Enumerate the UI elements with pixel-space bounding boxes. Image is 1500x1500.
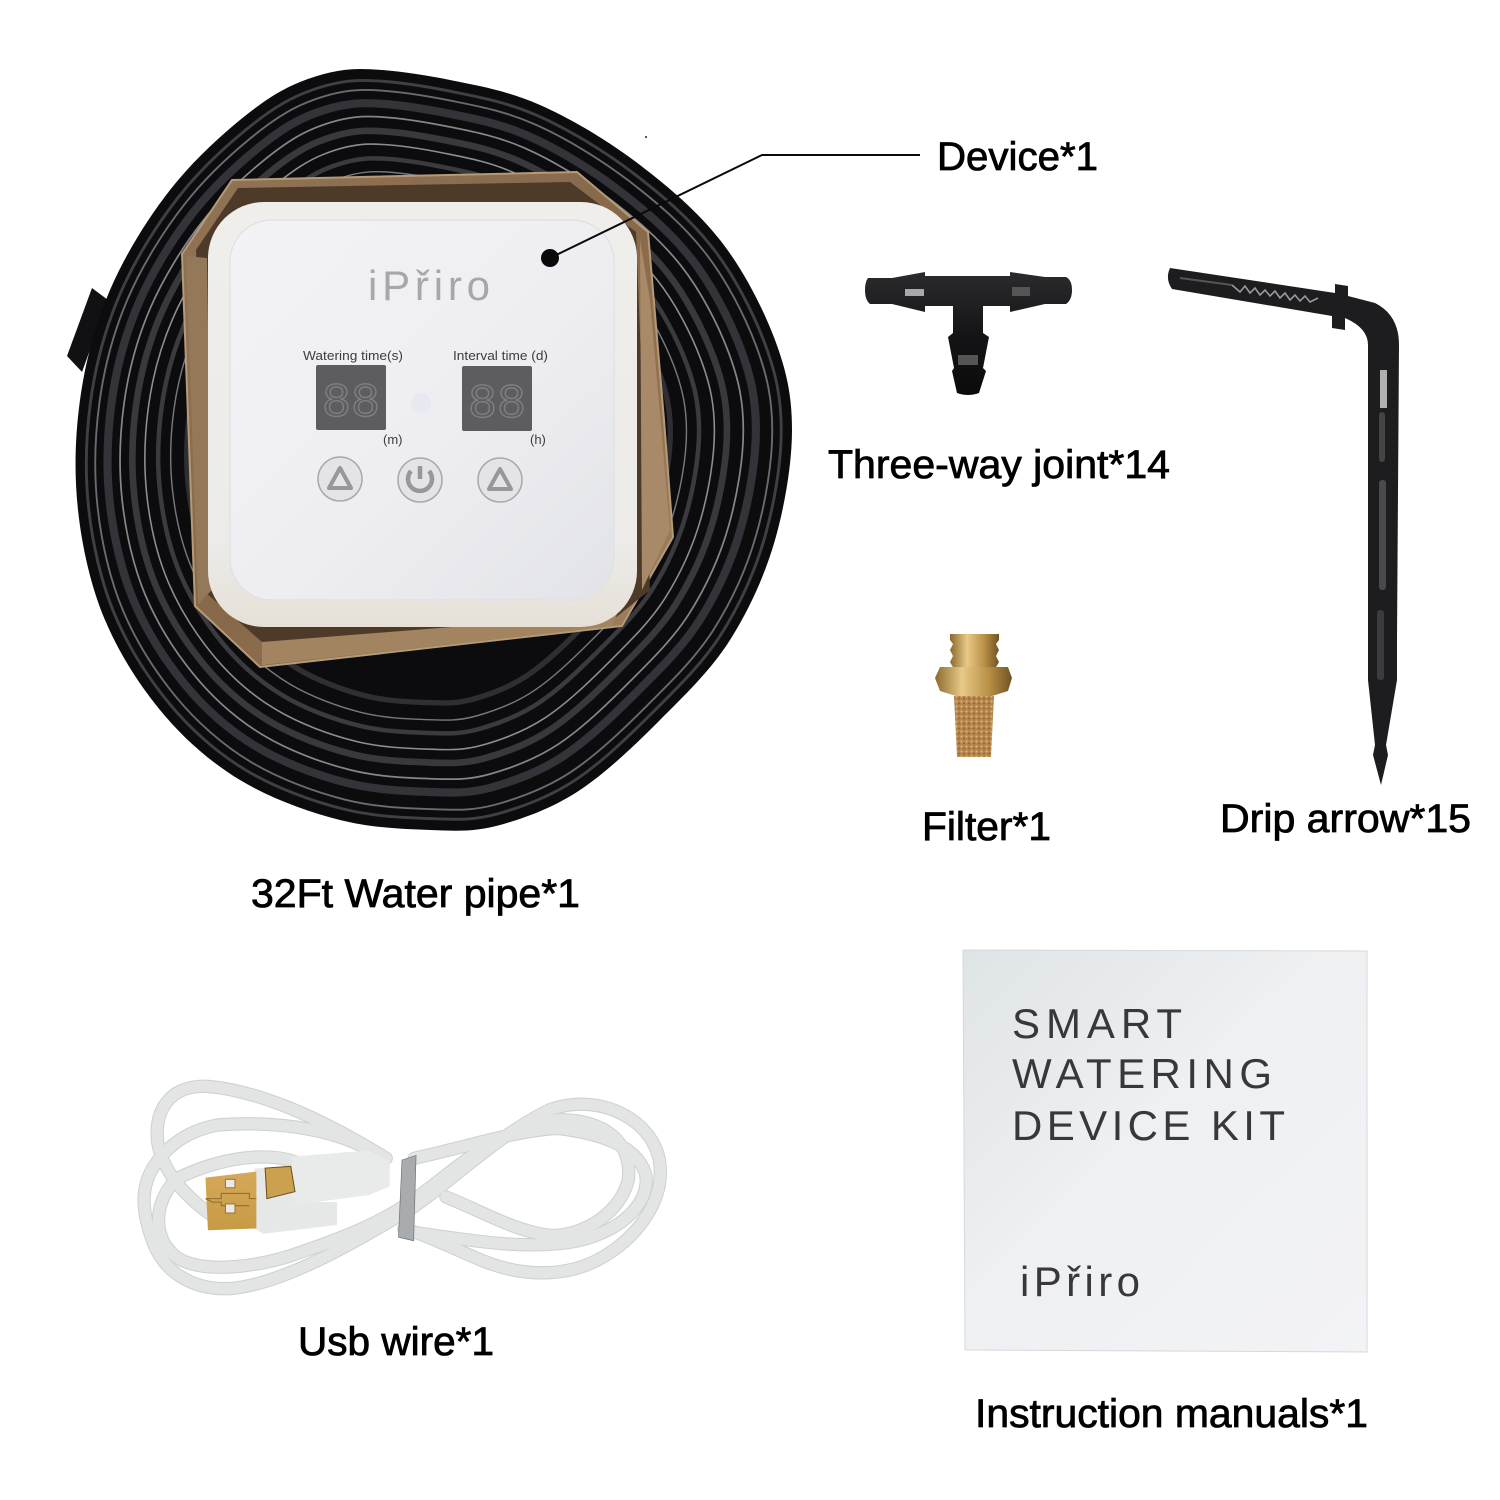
label usb wire: Usb wire*1: [298, 1320, 494, 1364]
unit h: (h): [530, 432, 546, 447]
brand logo: iPřiro: [368, 262, 490, 309]
coil body: [76, 69, 792, 831]
label drip arrow: Drip arrow*15: [1220, 797, 1471, 841]
cardboard wrap: [182, 172, 673, 667]
water pipe coil: [67, 69, 792, 831]
watering time label: Watering time(s): [303, 349, 403, 363]
cable loops: [144, 1086, 660, 1289]
interval time label: Interval time (d): [453, 349, 548, 363]
button up left: [318, 457, 362, 501]
stray speck: [645, 136, 647, 138]
coil rings: [86, 80, 781, 819]
right display: 88: [468, 378, 526, 432]
device face: [230, 220, 614, 600]
device: [208, 202, 637, 627]
left display: [316, 365, 386, 431]
label device: Device*1: [937, 135, 1098, 179]
manual title: DEVICE KIT: [1012, 1102, 1285, 1149]
silver band: [399, 1155, 416, 1241]
unit m: (m): [383, 432, 402, 447]
drip arrow: [1168, 268, 1399, 785]
manual cover: [963, 950, 1367, 1352]
device body: [208, 202, 637, 627]
manual title: [1012, 1000, 1285, 1149]
manual title: SMART: [1012, 1000, 1182, 1047]
label instruction manuals: Instruction manuals*1: [975, 1392, 1368, 1436]
left display: 88: [322, 377, 380, 431]
status light: [411, 393, 431, 413]
button up right: [478, 458, 522, 502]
device leader line: [541, 155, 920, 267]
label filter: Filter*1: [922, 805, 1051, 849]
micro usb connector: [265, 1151, 390, 1205]
manual title: WATERING: [1012, 1050, 1272, 1097]
label three-way joint: Three-way joint*14: [828, 443, 1170, 487]
pipe cut end: [67, 288, 108, 372]
usb wire: [144, 1086, 660, 1289]
filter: [935, 634, 1012, 757]
manual brand: iPřiro: [1020, 1258, 1140, 1305]
usb-a connector: [205, 1165, 337, 1234]
three-way joint: [865, 272, 1072, 395]
button power: [398, 458, 442, 502]
instruction manual: [963, 950, 1367, 1352]
right display: [462, 366, 532, 432]
label water pipe: 32Ft Water pipe*1: [251, 872, 580, 916]
